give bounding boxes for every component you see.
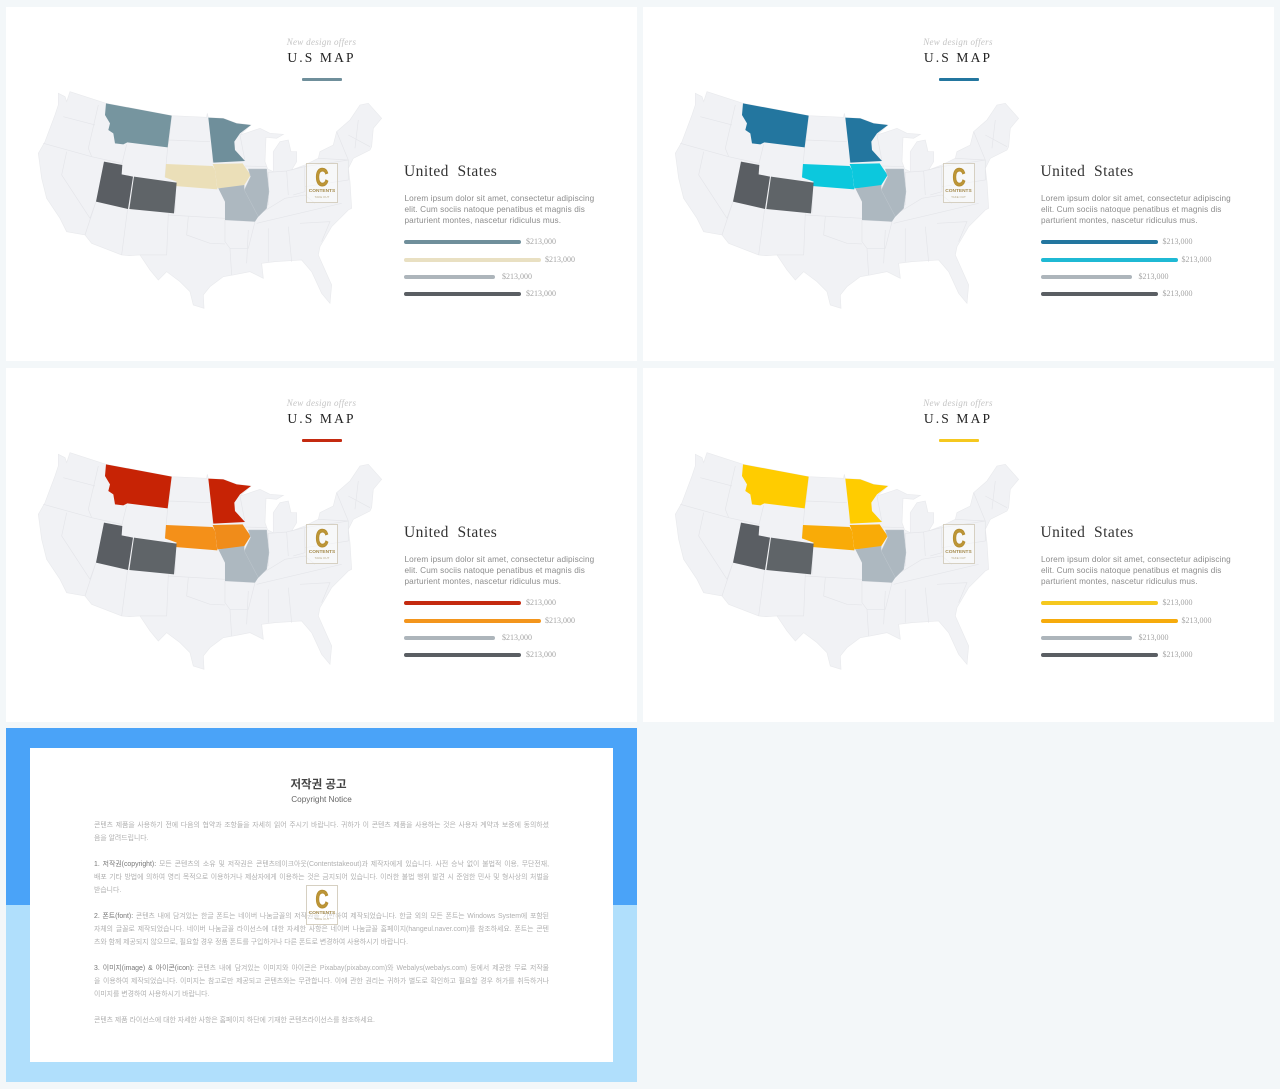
bar: item 3: $213,000 xyxy=(1138,633,1168,642)
title: U.S MAP xyxy=(287,410,356,426)
bar: item 4 xyxy=(404,289,556,298)
logo watermark: CONTENTS xyxy=(945,550,972,555)
title: U.S MAP xyxy=(287,50,356,64)
bar: item 2 xyxy=(404,616,575,625)
heading: United States xyxy=(404,163,497,180)
logo watermark xyxy=(942,163,974,203)
logo watermark: TAKE OUT xyxy=(315,195,329,199)
clause 2 line 3: 츠와 함께 제공되지 않으므로, 필요할 경우 정품 폰트를 구입하거나 다른 폰트로 변경하여 사용하시기 바랍니다. xyxy=(94,939,408,946)
bar: item 4 xyxy=(404,650,556,659)
bar: item 2: $213,000 xyxy=(545,616,575,625)
bar: item 4: $213,000 xyxy=(1162,650,1192,659)
bar: item 3 xyxy=(1041,633,1168,642)
bar: item 1: $213,000 xyxy=(526,237,556,246)
body text xyxy=(1041,194,1231,225)
logo watermark: TAKE OUT xyxy=(951,556,966,560)
clause 3 line 1: 3. 이미지(image) & 아이콘(icon): 콘텐츠 내에 담겨있는 이미지와 아이콘은 Pixabay(pixabay.com)와 Webalys(webalys.com) 등에서 제공한 무료 저작물 xyxy=(94,965,549,972)
clause 1 line 2: 배포 기타 방법에 의하여 영리 목적으로 이용하거나 제삼자에게 이용하는 것은 금지되어 있습니다. 이러한 불법 행위 발견 시 준엄한 민사 및 형사상의 처벌을 xyxy=(94,874,549,881)
map: United States, highlighted states xyxy=(675,452,1019,670)
intro line 1: 콘텐츠 제품을 사용하기 전에 다음의 협약과 조항들을 자세히 읽어 주시기 바랍니다. 귀하가 이 콘텐츠 제품을 사용하는 것은 사용자 계약과 보증에 동의하셨 xyxy=(94,822,549,829)
bar: item 4: $213,000 xyxy=(526,289,556,298)
bar: item 1 xyxy=(1041,237,1192,246)
body text: Lorem ipsum dolor sit amet, consectetur adipiscing xyxy=(404,555,594,564)
clause 1 line 1: 1. 저작권(copyright): 모든 콘텐츠의 소유 및 저작권은 콘텐츠테이크아웃(Contentstakeout)과 제작자에게 있습니다. 사전 승낙 없이 불법적 이용, 무단전재, xyxy=(94,861,549,868)
body text: parturient montes, nascetur ridiculus mus. xyxy=(404,577,561,586)
logo watermark: CONTENTS xyxy=(309,550,335,555)
notice subtitle: Copyright Notice xyxy=(291,795,352,804)
subtitle: New design offers xyxy=(287,398,356,408)
subtitle: New design offers xyxy=(923,37,993,47)
logo watermark xyxy=(306,885,338,925)
logo watermark: C xyxy=(315,164,329,192)
body text: parturient montes, nascetur ridiculus mus. xyxy=(1041,577,1198,586)
heading: United States xyxy=(404,524,497,541)
body text: Lorem ipsum dolor sit amet, consectetur adipiscing xyxy=(1041,555,1231,564)
bar: item 1 xyxy=(1041,598,1192,607)
logo watermark: C xyxy=(315,886,329,914)
heading: United States xyxy=(1040,163,1134,180)
panel: red U.S map slide xyxy=(6,368,637,722)
bar: item 3 xyxy=(404,272,532,281)
subtitle: New design offers xyxy=(923,398,993,408)
bar: item 1: $213,000 xyxy=(1162,598,1192,607)
bar: item 4 xyxy=(1041,650,1192,659)
bar: item 3: $213,000 xyxy=(502,633,532,642)
body text xyxy=(404,194,594,225)
bar: item 3: $213,000 xyxy=(502,272,532,281)
map: United States, highlighted states xyxy=(38,92,382,308)
panel: copyright notice xyxy=(6,728,637,1082)
notice title: 저작권 공고 xyxy=(290,779,347,791)
logo watermark: CONTENTS xyxy=(309,189,335,194)
title underline xyxy=(938,78,978,81)
panel: yellow U.S map slide xyxy=(642,368,1274,722)
logo watermark: CONTENTS xyxy=(945,189,972,194)
bar: item 2 xyxy=(1041,255,1212,264)
logo watermark: C xyxy=(315,525,329,553)
bar: item 3 xyxy=(404,633,532,642)
title underline xyxy=(302,439,342,442)
clause 2 line 1: 2. 폰트(font): 콘텐츠 내에 담겨있는 한글 폰트는 네이버 나눔글꼴의 저작권을 기반하여 제작되었습니다. 한글 외의 모든 폰트는 Windows System에 포함된 xyxy=(94,913,549,920)
logo watermark xyxy=(306,163,338,203)
body text: elit. Cum sociis natoque penatibus et magnis dis xyxy=(404,566,585,575)
logo watermark: C xyxy=(952,164,965,192)
body text: Lorem ipsum dolor sit amet, consectetur adipiscing xyxy=(404,194,594,203)
body text: elit. Cum sociis natoque penatibus et magnis dis xyxy=(1041,566,1222,575)
notice card xyxy=(30,748,613,1062)
bar: item 2: $213,000 xyxy=(1182,255,1212,264)
heading: United States xyxy=(1040,524,1134,541)
bar: item 2: $213,000 xyxy=(1182,616,1212,625)
closing line: 콘텐츠 제품 라이선스에 대한 자세한 사항은 홈페이지 하단에 기재한 콘텐츠라이선스를 참조하세요. xyxy=(94,1017,375,1024)
body text: elit. Cum sociis natoque penatibus et magnis dis xyxy=(1041,205,1222,214)
title underline xyxy=(302,78,342,81)
panel: teal U.S map slide xyxy=(6,7,637,361)
bar: item 4: $213,000 xyxy=(1162,289,1192,298)
bar: item 1 xyxy=(404,237,556,246)
bar: item 2: $213,000 xyxy=(545,255,575,264)
intro line 2: 음을 알려드립니다. xyxy=(94,835,149,842)
clause 3 line 2: 을 이용하여 제작되었습니다. 이미지는 참고로만 제공되고 콘텐츠와는 무관합니다. 이에 관한 권리는 귀하가 별도로 확인하고 필요할 경우 허가를 취득하거나 xyxy=(94,978,549,985)
logo watermark xyxy=(306,524,338,564)
map: United States, highlighted states xyxy=(675,92,1019,308)
logo watermark: TAKE OUT xyxy=(315,556,329,560)
clause 2 line 2: 자체의 글꼴로 제작되었습니다. 네이버 나눔글꼴 라이선스에 대한 자세한 사항은 네이버 나눔글꼴 홈페이지(hangeul.naver.com)를 참조하세요. 폰트는 콘텐 xyxy=(94,926,549,933)
logo watermark: TAKE OUT xyxy=(951,195,966,199)
bar: item 4 xyxy=(1041,289,1192,298)
map: United States, highlighted states xyxy=(38,452,382,670)
body text xyxy=(404,555,594,586)
clause 1 line 3: 받습니다. xyxy=(94,887,121,894)
bar: item 2 xyxy=(1041,616,1212,625)
body text: elit. Cum sociis natoque penatibus et magnis dis xyxy=(404,205,585,214)
body text: Lorem ipsum dolor sit amet, consectetur adipiscing xyxy=(1041,194,1231,203)
title: U.S MAP xyxy=(924,410,992,426)
subtitle: New design offers xyxy=(287,37,356,47)
body text: parturient montes, nascetur ridiculus mus. xyxy=(404,216,561,225)
bar: item 1: $213,000 xyxy=(526,598,556,607)
clause 3 line 3: 이미지를 변경하여 사용하시기 바랍니다. xyxy=(94,991,209,998)
bar: item 4: $213,000 xyxy=(526,650,556,659)
bar: item 1 xyxy=(404,598,556,607)
logo watermark: C xyxy=(952,525,965,553)
logo watermark: CONTENTS xyxy=(309,911,335,916)
logo watermark xyxy=(942,524,974,564)
logo watermark: TAKE OUT xyxy=(315,917,329,921)
panel: blue U.S map slide xyxy=(642,7,1274,361)
body text: parturient montes, nascetur ridiculus mus. xyxy=(1041,216,1198,225)
bar: item 3 xyxy=(1041,272,1168,281)
title underline xyxy=(938,439,978,442)
bar: item 2 xyxy=(404,255,575,264)
body text xyxy=(1041,555,1231,586)
title: U.S MAP xyxy=(924,50,992,64)
bar: item 1: $213,000 xyxy=(1162,237,1192,246)
bar: item 3: $213,000 xyxy=(1138,272,1168,281)
